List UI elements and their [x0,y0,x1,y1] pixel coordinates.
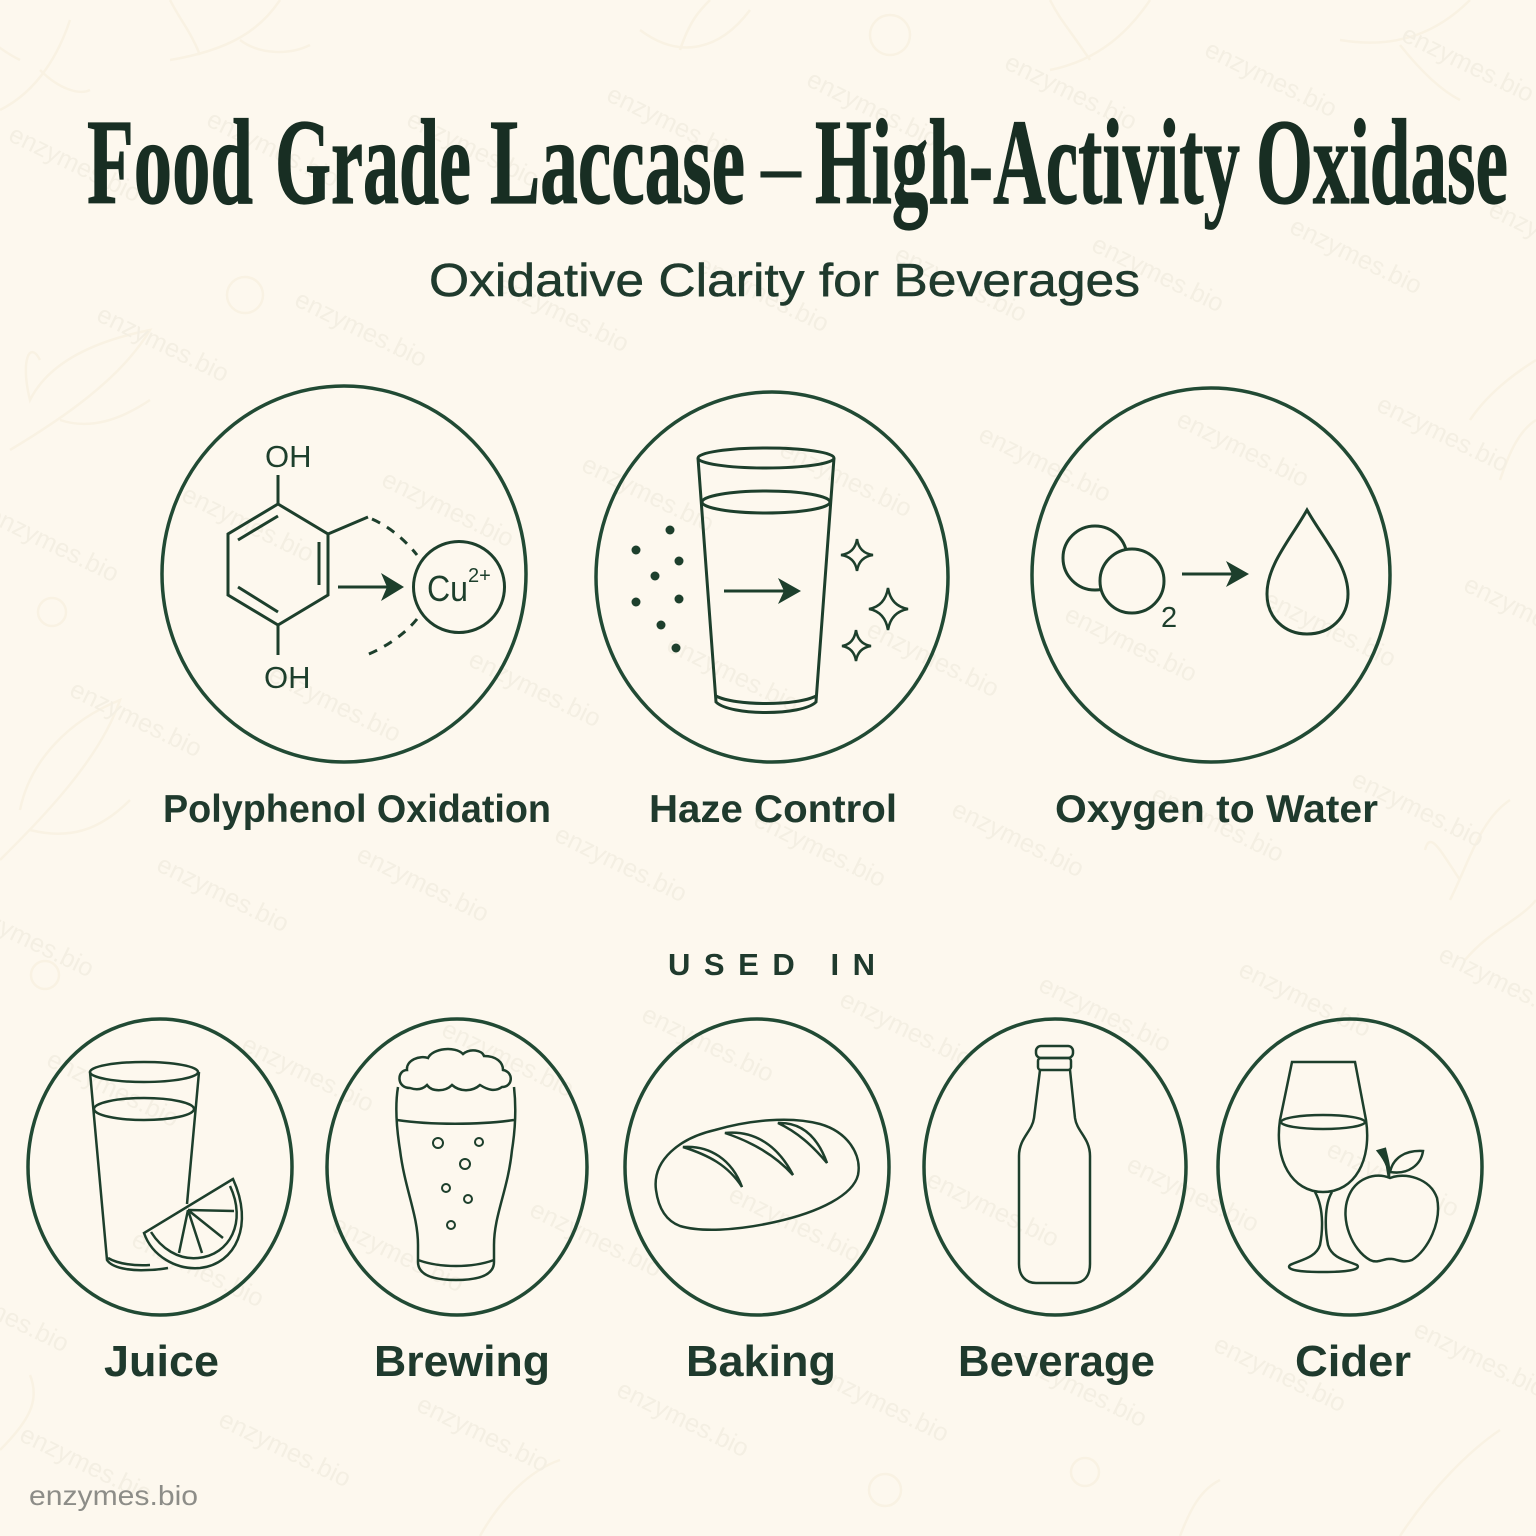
title: Food [87,95,253,230]
text: enzymes.bio [92,300,233,388]
icon: juice glass [90,1062,199,1270]
icon: dashed bonds [364,519,417,656]
text: enzymes.bio [1034,970,1175,1058]
text: enzymes.bio [15,1420,156,1508]
text: enzymes.bio [177,480,318,568]
icon: bottle [1019,1046,1090,1283]
icon: oxygen molecule [1063,526,1177,634]
label: oxygen to water: Oxygen to Water [1055,788,1378,831]
panel: haze control [596,392,948,762]
text: enzymes.bio [890,240,1031,328]
text: enzymes.bio [1172,405,1313,493]
text: enzymes.bio [377,465,518,553]
text: enzymes.bio [812,1360,953,1448]
panel: brewing [327,1019,587,1315]
title: Grade [275,95,471,230]
text: enzymes.bio [612,1375,753,1463]
title [87,95,1508,230]
icon: citrus wedge [144,1179,242,1268]
text: enzymes.bio [437,1015,578,1103]
badge circle [924,1019,1186,1315]
badge circle [28,1019,292,1315]
panel: polyphenol oxidation [162,386,526,762]
text: enzymes.bio [1372,390,1513,478]
icon: apple [1345,1149,1438,1261]
text: enzymes.bio [402,105,543,193]
heading: used in: USED IN [668,947,875,982]
icon: clear glass [698,448,834,712]
icon: bubbles [433,1138,483,1229]
label: juice: Juice [104,1337,219,1386]
text: enzymes.bio [835,985,976,1073]
label: baking: Baking [686,1337,836,1386]
text: enzymes.bio [637,1000,778,1088]
badge circle [327,1019,587,1315]
text: enzymes.bio [974,420,1115,508]
footer brand: enzymes.bio [29,1480,198,1511]
text: enzymes.bio [1209,1330,1350,1418]
icon: oxygen molecule: 2 [1161,602,1177,634]
text: enzymes.bio [1234,955,1375,1043]
text: enzymes.bio [214,1405,355,1493]
icon: bread loaf [656,1120,859,1230]
text: enzymes.bio [1347,765,1488,853]
label: brewing: Brewing [374,1337,550,1386]
text: enzymes.bio [1147,780,1288,868]
panel: baking [625,1019,889,1315]
icon: haze particles [632,526,684,652]
text: enzymes.bio [525,1195,666,1283]
text: enzymes.bio [1087,230,1228,318]
text: enzymes.bio [1397,20,1536,108]
icon: beer glass [396,1087,515,1280]
panel: beverage [924,1019,1186,1315]
text: enzymes.bio [152,850,293,938]
text: enzymes.bio [327,1210,468,1298]
text: enzymes.bio [1200,35,1341,123]
text: enzymes.bio [1010,1345,1151,1433]
text: enzymes.bio [290,285,431,373]
text: enzymes.bio [692,250,833,338]
icon: beer foam [399,1049,511,1090]
text: enzymes.bio [237,1030,378,1118]
text: enzymes.bio [662,630,803,718]
text: enzymes.bio [202,105,343,193]
text: enzymes.bio [1285,212,1426,300]
text: enzymes.bio [602,80,743,168]
text: enzymes.bio [724,1180,865,1268]
text: enzymes.bio [352,840,493,928]
badge circle [1032,388,1390,762]
badge circle [162,386,526,762]
text: enzymes.bio [492,270,633,358]
text: enzymes.bio [464,645,605,733]
icon: arrow to copper [338,573,404,601]
text: enzymes.bio [65,675,206,763]
icon: copper ion: Cu [427,568,468,609]
icon: sparkles [841,539,908,661]
text: enzymes.bio [577,450,718,538]
icon: polyphenol ring [228,475,368,655]
badge circle [625,1019,889,1315]
label: haze control: Haze Control [649,788,897,831]
text: enzymes.bio [550,820,691,908]
label: beverage: Beverage [958,1337,1155,1386]
text: enzymes.bio [127,1225,268,1313]
badge circle [596,392,948,762]
panel: cider [1218,1019,1482,1315]
text: enzymes.bio [1259,585,1400,673]
icon: clarifying arrow [724,578,801,604]
badge circle [1218,1019,1482,1315]
title: High-Activity [815,95,1240,230]
text: enzymes.bio [1060,600,1201,688]
panel: oxygen to water [1032,388,1390,762]
text: enzymes.bio [4,120,145,208]
icon: water drop [1267,510,1348,634]
text: enzymes.bio [1322,1135,1463,1223]
text: enzymes.bio [1000,48,1141,136]
text: enzymes.bio [802,65,943,153]
icon: wine glass [1279,1062,1367,1272]
title: – [760,95,802,230]
icon: copper ion [414,542,504,632]
panel: juice [28,1019,292,1315]
text: enzymes.bio [264,660,405,748]
icon: copper ion: 2+ [468,565,491,587]
text: enzymes.bio [947,795,1088,883]
label: cider: Cider [1295,1337,1411,1386]
hydroxyl bottom: OH [264,660,310,695]
label: polyphenol oxidation: Polyphenol Oxidation [163,788,551,831]
text: enzymes.bio [775,435,916,523]
title: Laccase [490,95,745,230]
icon: arrow [1182,561,1249,587]
text: enzymes.bio [1122,1150,1263,1238]
text: enzymes.bio [749,805,890,893]
text: enzymes.bio [862,615,1003,703]
text: enzymes.bio [922,1165,1063,1253]
hydroxyl top: OH [265,439,312,474]
text: enzymes.bio [412,1390,553,1478]
text: enzymes.bio [42,1045,183,1133]
subtitle: Oxidative Clarity for Beverages [429,254,1140,306]
